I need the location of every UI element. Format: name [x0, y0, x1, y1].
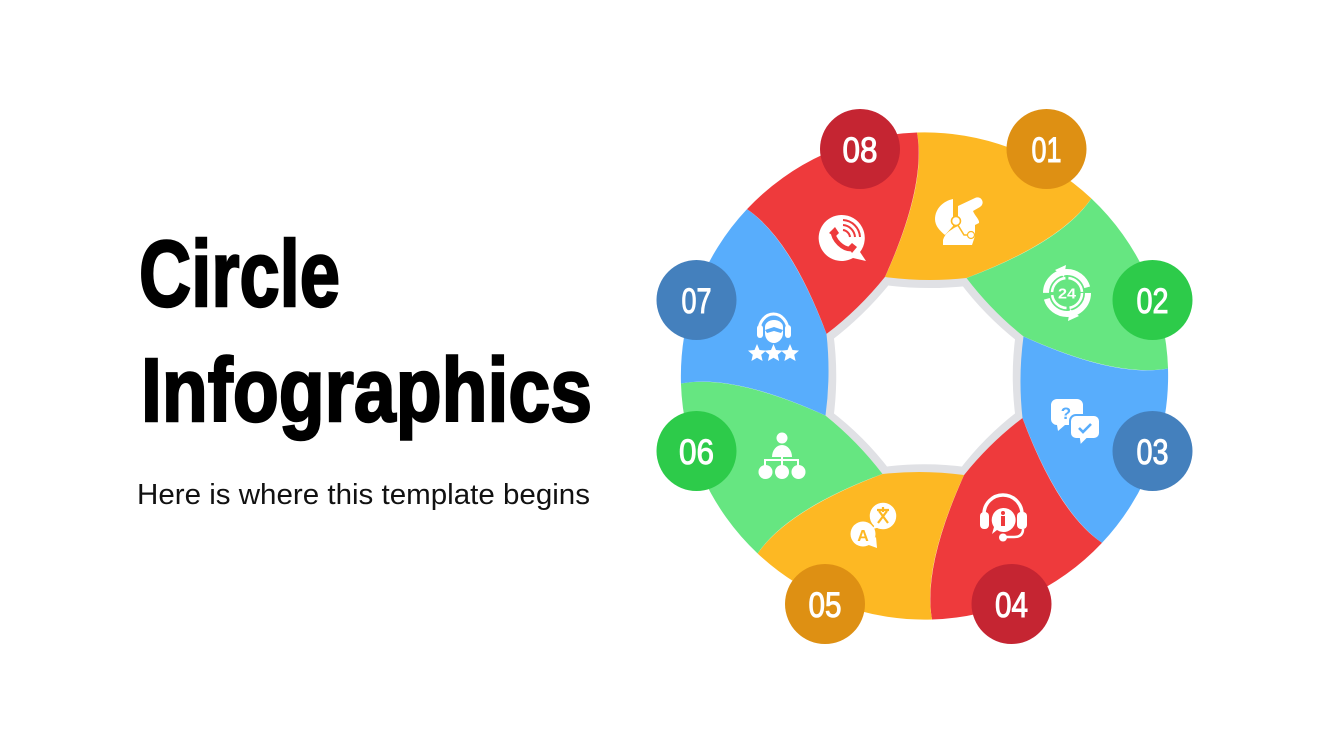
- icon: translation bubbles: [850, 502, 897, 548]
- icon: phone call bubble: [819, 215, 866, 261]
- segment 01 yellow: [885, 132, 1091, 280]
- badge 08: 08: [842, 131, 878, 170]
- segment 02 green: [964, 176, 1215, 426]
- badge 07: 07: [682, 282, 712, 321]
- segment 07 blue: [681, 209, 829, 416]
- icon: info headset: [980, 495, 1027, 542]
- icon: 24 hours: 24: [1058, 286, 1077, 302]
- badge 01: [1006, 109, 1086, 189]
- badge 07: [656, 260, 736, 340]
- title: Infographics: [141, 341, 592, 441]
- badge 05: 05: [808, 586, 842, 625]
- icon: question and check chat bubbles: [1051, 399, 1100, 446]
- segment 03 blue: [1020, 336, 1168, 543]
- segment 08 red: [724, 86, 975, 336]
- badge 06: [656, 411, 736, 491]
- segment 05 yellow: [758, 472, 964, 620]
- icon: agent head with headset: [935, 197, 983, 245]
- circle diagram: [634, 86, 1215, 666]
- badge 04: [972, 564, 1052, 644]
- segment 06 green: [634, 326, 885, 576]
- icon: question and check chat bubbles: ?: [1061, 404, 1071, 423]
- badge 02: 02: [1136, 282, 1168, 321]
- title: [139, 221, 592, 441]
- segment 04 red: [874, 416, 1125, 666]
- badge 06: 06: [679, 433, 714, 472]
- badge 01: 01: [1032, 131, 1062, 170]
- badge 02: [1112, 260, 1192, 340]
- icon: hierarchy of people: [758, 432, 806, 479]
- icon: rated support agent: [748, 314, 799, 361]
- badge 03: [1112, 411, 1192, 491]
- badge 03: 03: [1136, 433, 1168, 472]
- subtitle: Here is where this template begins: [137, 479, 590, 511]
- icon: 24 hours: [1046, 265, 1088, 321]
- inner grey ring: [826, 277, 1024, 475]
- badge 04: 04: [995, 586, 1028, 625]
- badge 08: [820, 109, 900, 189]
- icon: translation bubbles: A: [857, 528, 869, 545]
- title: Circle: [139, 221, 340, 326]
- badge 05: [785, 564, 865, 644]
